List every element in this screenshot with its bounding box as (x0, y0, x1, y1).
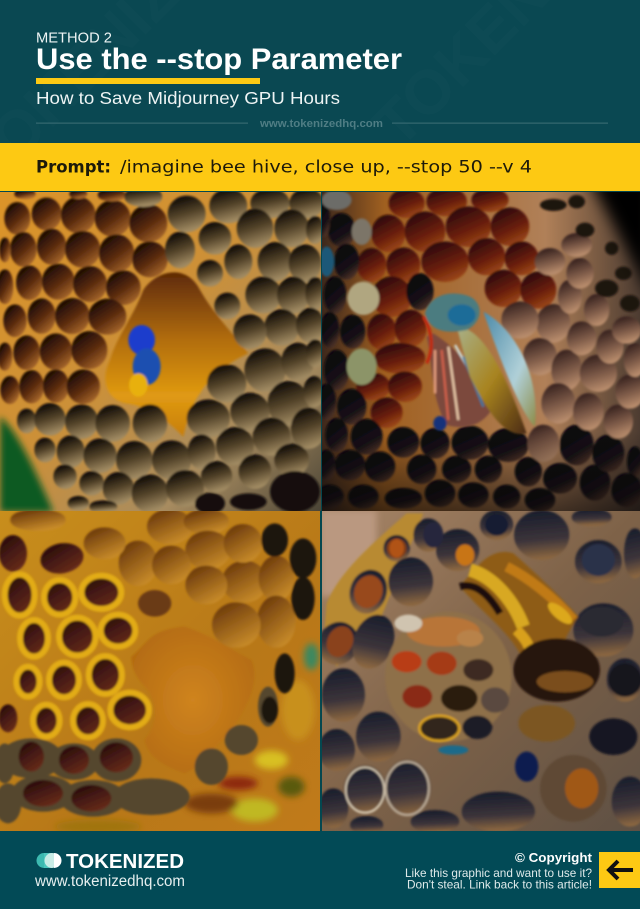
copyright note: Like this graphic and want to use it? (405, 866, 592, 880)
image: top-left bee hive (0, 192, 321, 511)
title: Use the --stop Parameter (36, 43, 402, 76)
eyebrow: method number: METHOD 2 (36, 30, 112, 46)
icon: left arrow (609, 861, 633, 879)
website line: www.tokenizedhq.com (259, 118, 383, 130)
lower-left ring highlights (346, 767, 384, 813)
prompt band (0, 143, 640, 191)
footer panel (0, 831, 640, 909)
watermark (0, 0, 640, 200)
pale patches (347, 282, 379, 315)
honey patch (131, 627, 254, 773)
copyright heading: © Copyright (515, 850, 593, 865)
subtitle: How to Save Midjourney GPU Hours (36, 88, 340, 108)
footer url: www.tokenizedhq.com (34, 873, 185, 890)
title underline (36, 78, 260, 84)
striped yellow centre (460, 552, 578, 667)
image: top-right bee hive (322, 192, 640, 511)
icon: bee (423, 294, 536, 434)
honey patch (105, 272, 248, 437)
mottled lower right (55, 643, 319, 834)
header background (0, 0, 640, 143)
copyright note (405, 866, 592, 892)
icon: logo mark (36, 853, 62, 868)
small central comb (385, 612, 512, 742)
blurred upper-left background (320, 510, 377, 597)
copyright note: Don't steal. Link back to this article! (407, 878, 592, 892)
icon: blue bee (128, 325, 161, 397)
image: bottom-right bee hive (322, 511, 640, 831)
green corner (0, 417, 53, 512)
fade overlays (320, 190, 640, 512)
orange-core cell (540, 755, 607, 822)
image: bottom-left bee hive (0, 511, 321, 831)
logo wordmark: TOKENIZED (66, 851, 184, 873)
prompt label: Prompt: (36, 158, 111, 178)
lower dark rim cells (0, 687, 278, 823)
header panel (0, 0, 640, 200)
back arrow button (599, 852, 640, 888)
prompt text: /imagine bee hive, close up, --stop 50 --v 4 (120, 158, 532, 178)
